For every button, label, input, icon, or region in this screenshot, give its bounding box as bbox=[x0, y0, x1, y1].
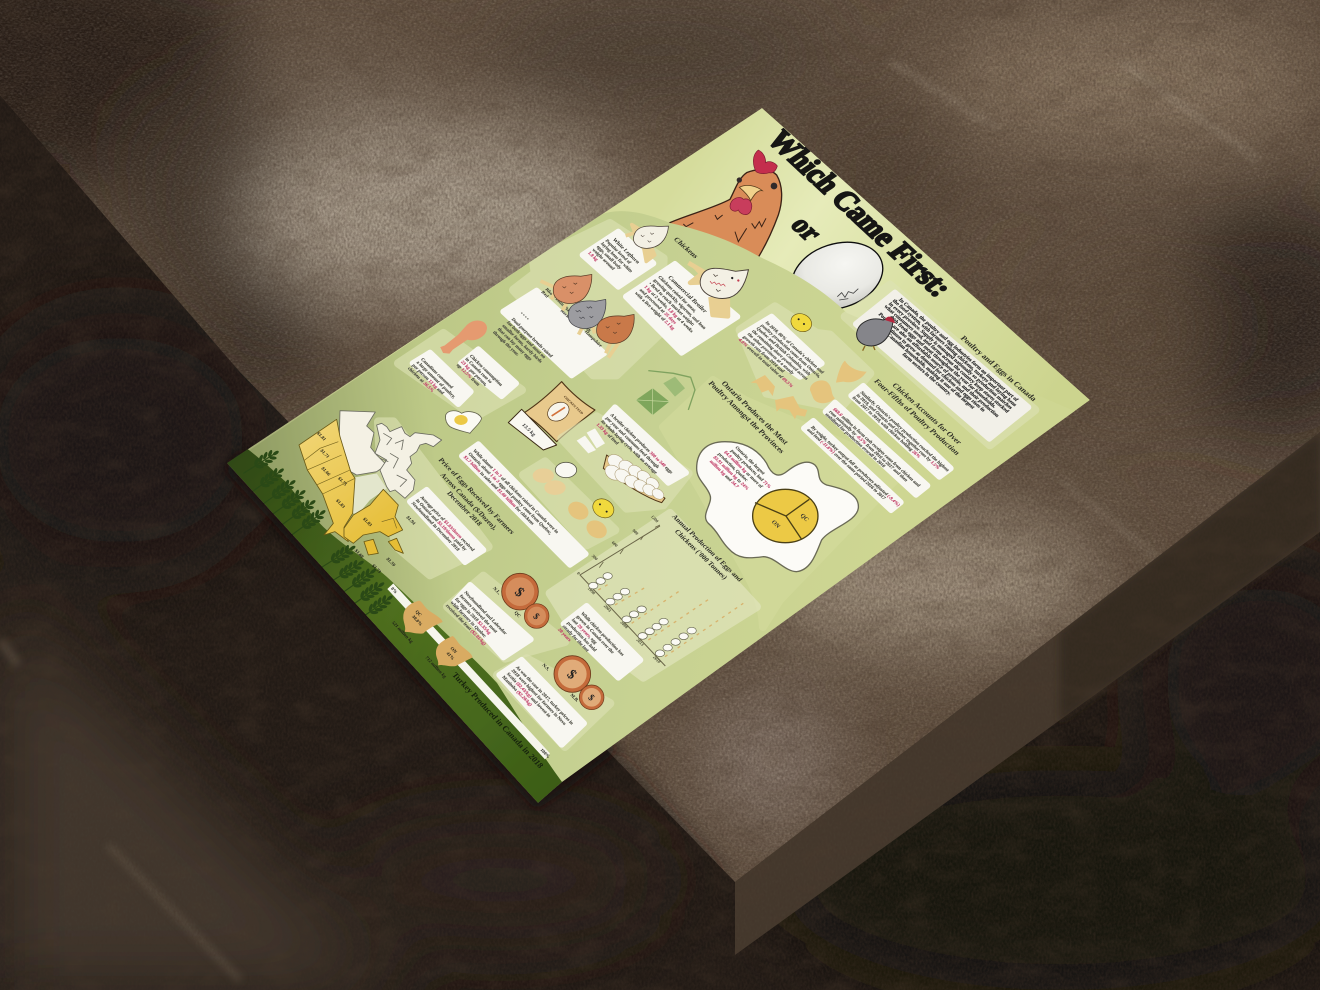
card: Commercial Broiler: • Bred to reach market weight: bbox=[647, 282, 696, 328]
map: Quebec bbox=[344, 489, 403, 543]
card: price of eggs: Average price of $1.03/dozen received bbox=[418, 496, 475, 553]
icon: coin QC bbox=[524, 604, 549, 628]
icon: turkey silhouette bbox=[810, 380, 835, 403]
icon: white broiler hen bbox=[679, 257, 748, 320]
card: chart notes: steady for the last bbox=[561, 625, 590, 653]
card: NL turkey price: Newfoundland and Labrador bbox=[462, 591, 507, 636]
icon: barn bbox=[636, 371, 695, 415]
card: Rhode Island Red, Barred Plymouth Rock, Hampshire: Rhode Island bbox=[543, 288, 567, 309]
card: turkey decline: By weight, turkey output fell as producers adjusted (-9.4%) bbox=[809, 426, 901, 508]
turkey marker ON: 41% bbox=[444, 652, 455, 662]
Ontario section lighter background bbox=[663, 380, 905, 627]
card: Poultry and Eggs in Canada bbox=[856, 293, 1039, 439]
card: Commercial Broiler: growing quickly, vigorous, and lean bbox=[652, 279, 707, 331]
card: chart notes: last 20 years, egg bbox=[570, 618, 598, 646]
card: price of eggs: Newfoundland in December 2018 bbox=[410, 502, 460, 553]
turkey marker QC bbox=[403, 601, 443, 634]
card: feed bbox=[594, 407, 686, 485]
card: chick production: 4.8% overall in total value of 89.5% bbox=[736, 338, 794, 389]
map: province borders bbox=[304, 442, 397, 528]
pie chart yolk: ON bbox=[770, 520, 781, 530]
icon: pig silhouette bbox=[751, 375, 775, 396]
map: province prices: $1.66 bbox=[319, 467, 331, 477]
card: Rhode Island Red, Barred Plymouth Rock, Hampshire: through the year. bbox=[491, 331, 520, 357]
card: value growth: stabilised for production overall in 2018 bbox=[823, 413, 886, 469]
card: chick production: poultry production came from Ontario, bbox=[759, 324, 821, 379]
coin labels: QC bbox=[512, 611, 522, 619]
fried egg text: poultry producer, had 71% bbox=[729, 449, 772, 490]
card: White Leghorn: weighs around bbox=[590, 248, 616, 271]
card: chick production bbox=[736, 317, 826, 393]
section: upper-right panels bbox=[636, 285, 1039, 457]
card: Poultry and Eggs in Canada: continues to grow as demand for chicken and eggs rises in bbox=[882, 324, 986, 413]
card: NS turkey price: Scotia ($2.43/kg) and lowest in bbox=[505, 672, 551, 719]
backdrop: chick and livestock bbox=[740, 307, 870, 408]
card: meat consumption two: Chicken consumption bbox=[468, 354, 503, 388]
backdrop: breeds bbox=[513, 223, 663, 375]
icon: Rhode Island Red hen bbox=[540, 274, 592, 310]
card: value growth: $68.6 million in farm cash receipts came from chicken and bbox=[831, 408, 921, 488]
card: feed: its whole laying cycle, with an average bbox=[599, 420, 658, 475]
heading: Chickens: Chickens bbox=[672, 236, 701, 260]
card: Rhode Island Red, Barred Plymouth Rock, Hampshire: Red bbox=[539, 290, 549, 299]
card: chicken share: in 2018, and Ontario and Quebec together rose by 1.5% bbox=[854, 394, 941, 471]
map: province prices: $1.83 bbox=[334, 499, 346, 510]
card: Commercial Broiler: and processed at 35 days bbox=[638, 288, 677, 325]
card: chick production: In 2018, 80% of Canada's chicken and bbox=[763, 321, 825, 375]
poster bbox=[220, 108, 1095, 803]
icon: grey barred hen bbox=[568, 299, 606, 335]
section: Canada price map bbox=[240, 411, 516, 626]
card: meat consumption one: per person 13 kg and bbox=[410, 364, 445, 396]
card: NL turkey price: for eggs in 2018 $2.35/kg bbox=[453, 597, 492, 636]
fried egg text: $3.91 million kg to 24% bbox=[711, 456, 750, 492]
card: Rhode Island Red, Barred Plymouth Rock, Hampshire: for both eggs and meat on bbox=[505, 321, 546, 360]
card: Poultry and Eggs in Canada: Poultry are also an affordable source of protein, and their production bbox=[877, 312, 1000, 419]
card: NS turkey price: Manitoba ($2.20/kg) bbox=[500, 675, 533, 708]
map: northern territories bbox=[339, 411, 387, 475]
icon: tan eggs and white egg bbox=[533, 462, 577, 495]
card: NL turkey price: farmers received the most bbox=[458, 594, 498, 635]
poster base sheet bbox=[227, 108, 1090, 803]
icon: cow silhouette bbox=[775, 396, 807, 419]
card: chick production: the remaining share produced across bbox=[750, 330, 809, 381]
icon: grey hen with santa hat bbox=[857, 317, 895, 351]
card: Rhode Island Red, Barred Plymouth Rock, Hampshire: Barred Plymouth bbox=[563, 306, 592, 333]
egg rows bbox=[589, 573, 696, 657]
map: island details bbox=[380, 433, 407, 487]
card: Commercial Broiler bbox=[626, 264, 737, 353]
card: Poultry and Eggs in Canada: in every province. Supply is managed nationally so production matches bbox=[887, 302, 1014, 411]
card: feed: per year and consumes feed through bbox=[604, 417, 660, 470]
card: chart notes: While chicken production has bbox=[579, 612, 625, 657]
left corner shading bbox=[228, 356, 425, 646]
title: Which Came First: bbox=[760, 125, 959, 302]
section: Chicken Accounts cards bbox=[804, 386, 951, 510]
icon: coin QC: $ bbox=[531, 611, 542, 622]
backdrop: chart bbox=[550, 513, 757, 677]
card: White Leghorn: Popular breed of bbox=[603, 239, 632, 265]
hen eyes bbox=[737, 177, 777, 189]
heading: Ontario: Poultry Amongst the Provinces bbox=[706, 379, 787, 455]
fried egg text: million kg and 34.7 bbox=[708, 460, 740, 490]
heading: Price of Eggs: December 2018 bbox=[445, 490, 484, 528]
turkey tonnage labels: 712 million kg bbox=[423, 656, 447, 680]
heading: Chicken Accounts: Chicken Accounts for Over bbox=[890, 381, 964, 446]
section: chicken breeds bbox=[398, 220, 748, 450]
card: NS turkey price bbox=[499, 660, 584, 745]
turkey marker ON: ON bbox=[448, 647, 458, 655]
chart axis labels: 1998 bbox=[587, 586, 597, 595]
icon: feed sack: 13.5 kg bbox=[520, 423, 537, 438]
chicken rows bbox=[598, 583, 743, 657]
hen wattle bbox=[730, 197, 752, 215]
icon: coin M.B.: $ bbox=[586, 692, 597, 704]
chart axis labels: 1200 bbox=[650, 514, 660, 523]
heading: Price of Eggs: Across Canada ($/Dozen), bbox=[438, 472, 499, 532]
card: Poultry and Eggs in Canada: what consumers need, and farms across the country keep stores stocked bbox=[882, 304, 1010, 414]
map: province prices: $1.73 bbox=[370, 564, 382, 575]
icon: Hampshire hen bbox=[597, 314, 634, 358]
icon: yellow chick bbox=[788, 310, 815, 335]
map: province prices: $1.59 bbox=[384, 557, 396, 568]
chart title: Chickens ('000 Tonnes) bbox=[673, 528, 729, 581]
wheat icons bbox=[240, 445, 396, 626]
card: Rhode Island Red, Barred Plymouth Rock, Hampshire: • • • • bbox=[518, 312, 530, 322]
coin labels: M.B. bbox=[568, 693, 579, 703]
coin labels: N.S. bbox=[540, 663, 550, 672]
card: chick production: the other provinces at a steady bbox=[745, 333, 795, 376]
dark green footer band bbox=[227, 447, 562, 803]
card: Poultry and Eggs in Canada: Canadian households, making it one of the largest bbox=[885, 333, 976, 410]
card: Rhode Island Red, Barred Plymouth Rock, Hampshire: that can lay many eggs bbox=[496, 327, 533, 362]
card: Poultry and Eggs in Canada: the food system, with farmers raising chickens, turkeys and laying hens bbox=[891, 298, 1018, 408]
card: Rhode Island Red, Barred Plymouth Rock, Hampshire: smaller farms, hardy birds bbox=[500, 324, 543, 364]
card: meat consumption one: a large amount of poultry, bbox=[415, 361, 456, 400]
chart axis labels: 2018 bbox=[652, 655, 662, 664]
card: Poultry and Eggs in Canada: with fresh eggs and meat throughout the year for households. bbox=[887, 315, 998, 410]
coin labels bbox=[491, 587, 579, 703]
turkey marker QC: QC bbox=[413, 610, 423, 618]
card: White Leghorn: 1.8 kg bbox=[586, 251, 599, 263]
backdrop: map and price bbox=[378, 422, 488, 575]
card: chicken share: from 2017 to 2018, with chicken holding 26% bbox=[850, 396, 921, 459]
card: NS turkey price: As was the case in 2017, turkey prices in bbox=[514, 666, 574, 726]
card: Rhode Island Red, Barred Plymouth Rock, Hampshire: Rock bbox=[558, 309, 570, 319]
heading: Chicken Accounts: Four-Fifths of Poultry Production bbox=[872, 378, 963, 457]
icon: feed sack bbox=[508, 382, 595, 450]
chart: turkey production bar: 100% bbox=[538, 748, 551, 760]
card: meat consumption one bbox=[406, 353, 471, 406]
section: eggs and feed bbox=[462, 407, 757, 677]
map: western provinces and Ontario bbox=[299, 419, 355, 542]
hen comb bbox=[753, 150, 777, 174]
card: Poultry and Eggs in Canada: In Canada, the poultry and egg industries form an important part of bbox=[897, 297, 1019, 403]
chart axis labels: 2003 bbox=[603, 604, 613, 613]
icon: equals sign bbox=[577, 428, 605, 453]
card: egg share: Ontario, about 1 in 3 eggs and poultry came from Quebec, bbox=[466, 452, 552, 536]
chart axis labels: 300 bbox=[591, 554, 599, 561]
map: province prices: $1.94 bbox=[404, 516, 416, 526]
icon: feed sack: CHICKEN FEED bbox=[562, 395, 585, 415]
backdrop: tray bbox=[562, 417, 688, 508]
card: egg share: While almost 1 in 3 of all chickens raised in Canada were in bbox=[471, 449, 559, 535]
card: Commercial Broiler: 1 kg at 2 weeks, 1.8 kg at 4 weeks bbox=[642, 285, 694, 334]
card: NL turkey price: received the least ($2.01/kg) bbox=[444, 604, 487, 647]
heading: Turkey Produced in Canada in 2018: Turkey Produced in Canada in 2018 bbox=[450, 671, 545, 770]
pie chart yolk: QC bbox=[798, 513, 809, 523]
icon: small fried egg bbox=[446, 411, 482, 433]
map: Hudson Bay bbox=[353, 473, 387, 514]
icon: egg tray bbox=[602, 451, 666, 503]
card: meat consumption two: up 12.5% from bbox=[455, 363, 480, 387]
hen feather marks bbox=[683, 215, 766, 242]
chart: turkey production bar bbox=[387, 583, 551, 760]
card: meat consumption one: Canadians consumed bbox=[419, 358, 454, 390]
icon: coin N.L.: $ bbox=[511, 585, 527, 601]
heading: Price of Eggs: Price of Eggs Received by Farmers bbox=[437, 457, 516, 536]
chart title: Annual Production of Eggs and bbox=[670, 513, 744, 583]
card: price of eggs bbox=[410, 490, 483, 562]
card: Commercial Broiler: Chickens raised for meat, bbox=[656, 275, 697, 314]
chart axis labels: 0 bbox=[576, 571, 581, 575]
backdrop: NL prices bbox=[447, 576, 565, 658]
chart axes bbox=[580, 526, 665, 666]
card: turkey decline: and feed (-11.8%) over the same period 2016 to 2017 bbox=[805, 428, 887, 501]
card: NL turkey price bbox=[444, 585, 531, 657]
icon: coin N.S.: $ bbox=[563, 667, 579, 683]
map: province prices: $1.71 bbox=[318, 449, 330, 460]
hen illustration bbox=[668, 150, 782, 260]
section: coins, chart card and turkey bbox=[387, 573, 640, 770]
map: province prices: $1.75 bbox=[336, 477, 348, 487]
card: egg share bbox=[462, 444, 586, 565]
card: chicken share: Similarly, Ontario's poultry production reached the highest bbox=[858, 391, 950, 473]
card: Rhode Island Red, Barred Plymouth Rock, Hampshire bbox=[491, 288, 605, 375]
card: feed: 1.33 kg of feed bbox=[594, 423, 619, 446]
card: Commercial Broiler: with a live weight of 2.1 kg bbox=[633, 292, 676, 332]
section: Ontario fried egg bbox=[697, 379, 858, 572]
icon: white leghorn hen bbox=[622, 220, 669, 264]
chart axis labels bbox=[576, 514, 662, 664]
map: arctic islands bbox=[375, 423, 442, 498]
backdrop: egg and chick bbox=[523, 462, 615, 545]
heading: Ontario: Ontario Produces the Most bbox=[719, 379, 791, 446]
chart axis labels: 2013 bbox=[635, 638, 645, 647]
fried egg text: production, Quebec bbox=[716, 452, 748, 483]
card: White Leghorn: laying hens for white bbox=[599, 242, 633, 274]
icon: hen silhouette bbox=[836, 361, 867, 383]
card: meat consumption two: in Canada rose to bbox=[463, 357, 493, 385]
map: Maritimes bbox=[364, 538, 403, 555]
card: White Leghorn: White Leghorn bbox=[611, 237, 641, 265]
icon: coin N.L. bbox=[502, 573, 538, 610]
card: White Leghorn: eggs, small body bbox=[595, 245, 623, 271]
icon: coin N.S. bbox=[554, 656, 591, 692]
card: feed: A broiler chicken produces 300 to 340 eggs bbox=[608, 413, 673, 475]
card: Commercial Broiler: Commercial Broiler bbox=[666, 275, 708, 314]
map: province prices: $1.81 bbox=[315, 432, 327, 443]
backdrop: meat bbox=[398, 333, 522, 417]
card: chick production: Quebec and British Columbia, with bbox=[754, 327, 811, 377]
card: meat consumption two: 23 kg per person, bbox=[459, 360, 488, 387]
card: Poultry and Eggs in Canada: farm sectors in the country. bbox=[900, 352, 953, 397]
fried egg text bbox=[707, 443, 777, 503]
card: value growth: rose nationally by -0.5% from 2016 to 2017 and then bbox=[827, 410, 909, 483]
fried egg text: Ontario, the largest bbox=[733, 446, 766, 476]
backdrop: poultry intro bbox=[845, 285, 1035, 445]
card: chart notes: grown in Canada over the bbox=[574, 615, 615, 655]
card: chart notes: production has held bbox=[565, 621, 597, 653]
chart axis labels: 2008 bbox=[619, 620, 629, 629]
fried egg text: $4.9 million kg or more of bbox=[722, 451, 763, 489]
fried egg shape bbox=[697, 442, 858, 572]
egg illustration bbox=[793, 242, 884, 308]
card: Poultry and Eggs in Canada: Poultry and Eggs in Canada bbox=[959, 334, 1039, 403]
chart: annual production of eggs and chickens bbox=[576, 514, 743, 666]
card: NL turkey price: while farmers in Quebec bbox=[449, 601, 487, 639]
turkey tonnage labels bbox=[390, 621, 447, 680]
chart axis labels: 900 bbox=[631, 528, 640, 536]
card: NS turkey price: 2018 were highest for farmers in Nova bbox=[509, 669, 567, 727]
card: White Leghorn bbox=[583, 232, 653, 287]
card: chick production: growth rate from 2014 and bbox=[741, 335, 785, 374]
green wave background layer bbox=[220, 211, 1095, 790]
icon: chicks bbox=[565, 495, 617, 542]
card: egg share: $1.7 billion in sales and $1.60 billion for chickens bbox=[462, 455, 535, 526]
card: meat consumption one: chicken at 36.5% bbox=[406, 367, 435, 394]
card: chart notes: 20 years bbox=[556, 628, 572, 643]
poster shadow bbox=[225, 450, 620, 810]
chart axis labels: 600 bbox=[611, 540, 619, 548]
hen beak bbox=[739, 185, 762, 201]
map: province prices bbox=[315, 432, 416, 575]
block side face bbox=[735, 432, 1320, 955]
word: or: or bbox=[783, 211, 829, 246]
icon: coin M.B. bbox=[579, 685, 604, 710]
turkey marker QC: 30.0% bbox=[410, 615, 423, 627]
map: province prices: $1.60 bbox=[353, 549, 365, 560]
card: Rhode Island Red, Barred Plymouth Rock, Hampshire: Hampshire bbox=[583, 330, 603, 348]
pie chart yolk bbox=[753, 489, 818, 543]
concrete scratches bbox=[888, 60, 1258, 560]
backdrop: NS prices bbox=[497, 659, 610, 747]
card: price of eggs: in Ontario and $3.10/dozen paid by bbox=[414, 499, 468, 553]
card: meat consumption two bbox=[455, 349, 516, 397]
card: Rhode Island Red, Barred Plymouth Rock, Hampshire: Dual-purpose breeds raised bbox=[510, 318, 553, 359]
map: province prices: $1.83 bbox=[361, 517, 373, 528]
card: chart notes bbox=[556, 606, 640, 678]
chart: turkey production bar: 0% bbox=[389, 587, 398, 595]
turkey marker ON bbox=[436, 636, 473, 666]
turkey tonnage labels: 521 million kg bbox=[390, 621, 414, 645]
coin labels: N.L. bbox=[491, 587, 501, 596]
icon: chicken drumstick bbox=[441, 321, 487, 353]
